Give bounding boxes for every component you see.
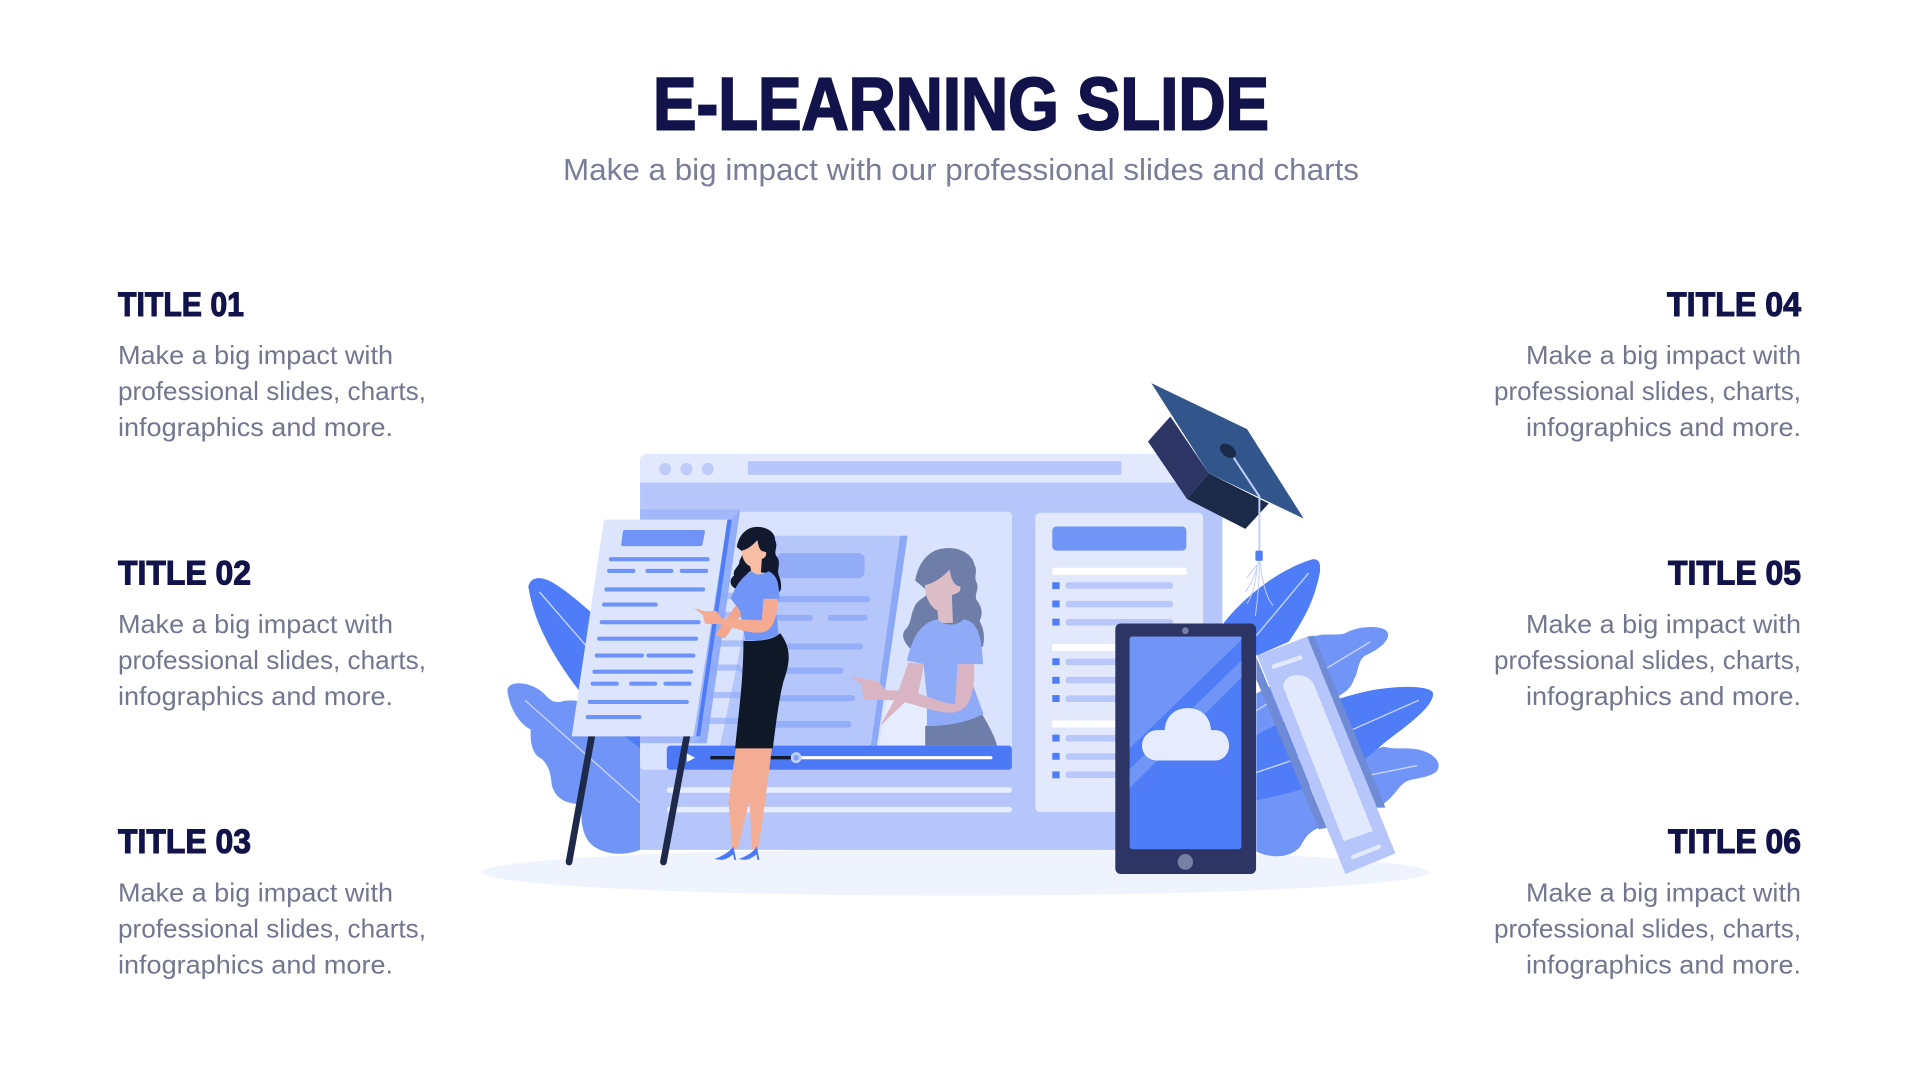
subtitle: Make a big impact with our professional slides and charts xyxy=(563,152,1359,187)
left leaf: dark xyxy=(528,578,640,752)
video panel xyxy=(640,509,1012,770)
tablet with cloud xyxy=(1115,624,1256,874)
text block: title 04: TITLE 04 xyxy=(1667,286,1801,324)
text block: title 01: infographics and more. xyxy=(118,412,393,442)
text block: title 06: Make a big impact with xyxy=(1526,878,1801,908)
text block: title 04: infographics and more. xyxy=(1526,412,1801,442)
text block: title 05: professional slides, charts, xyxy=(1494,645,1801,675)
text block: title 02 xyxy=(118,554,426,711)
back arm xyxy=(715,604,743,638)
text block: title 05: TITLE 05 xyxy=(1668,554,1801,592)
text block: title 05: infographics and more. xyxy=(1526,681,1801,711)
text block: title 02: Make a big impact with xyxy=(118,609,393,639)
icon: cloud xyxy=(1142,708,1229,760)
hair xyxy=(731,527,781,592)
browser window xyxy=(640,454,1222,850)
text block: title 01: professional slides, charts, xyxy=(118,376,426,406)
text block: title 02: TITLE 02 xyxy=(118,554,251,592)
video control bar xyxy=(667,746,1012,770)
book xyxy=(1256,636,1395,874)
shoes xyxy=(714,846,759,860)
skirt xyxy=(735,633,789,748)
right leaves xyxy=(1224,559,1439,856)
text block: title 06: TITLE 06 xyxy=(1668,823,1801,861)
text block: title 01: TITLE 01 xyxy=(118,286,244,324)
illustration: e-learning scene xyxy=(482,383,1439,896)
left leaf: light lobed xyxy=(507,683,640,854)
text block: title 01 xyxy=(118,286,426,442)
text block: title 03: Make a big impact with xyxy=(118,878,393,908)
text block: title 03: infographics and more. xyxy=(118,950,393,980)
face xyxy=(742,540,766,575)
video presenter xyxy=(850,548,997,746)
text block: title 04: Make a big impact with xyxy=(1526,340,1801,370)
text block: title 01: Make a big impact with xyxy=(118,340,393,370)
caption lines xyxy=(667,787,1012,812)
title: E-LEARNING SLIDE xyxy=(653,62,1269,146)
legs xyxy=(728,747,772,849)
graduation cap xyxy=(1148,383,1304,616)
text block: title 04: professional slides, charts, xyxy=(1494,376,1801,406)
text block: title 03 xyxy=(118,823,426,980)
browser title bar xyxy=(640,454,1222,482)
text block: title 05: Make a big impact with xyxy=(1526,609,1801,639)
text block: title 03: TITLE 03 xyxy=(118,823,251,861)
text block: title 05 xyxy=(1494,554,1801,711)
front arm xyxy=(694,599,777,633)
text block: title 02: infographics and more. xyxy=(118,681,393,711)
presenter woman xyxy=(694,527,789,860)
text block: title 02: professional slides, charts, xyxy=(118,645,426,675)
text block: title 06: infographics and more. xyxy=(1526,950,1801,980)
ground shadow xyxy=(482,849,1429,896)
text block: title 06 xyxy=(1494,823,1801,980)
shirt xyxy=(731,571,779,641)
text block: title 03: professional slides, charts, xyxy=(118,914,426,944)
text block: title 06: professional slides, charts, xyxy=(1494,914,1801,944)
presentation board xyxy=(569,509,743,862)
text block: title 04 xyxy=(1494,286,1801,442)
sidebar panel xyxy=(1035,513,1203,812)
